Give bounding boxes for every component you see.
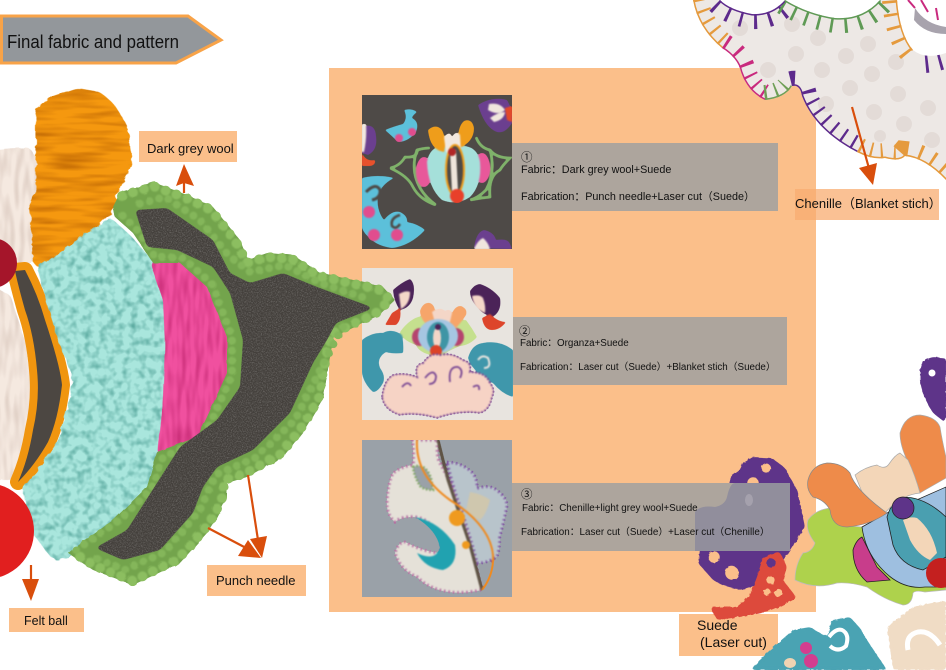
label: suede: Suede xyxy=(697,617,738,633)
felt ball: dark red xyxy=(0,238,17,288)
label: punch needle xyxy=(207,565,306,596)
text box 3: ③ xyxy=(521,488,533,501)
sample photo 2: organza with suede xyxy=(362,268,513,420)
arrow: felt ball xyxy=(22,565,39,601)
suede cloud: cream xyxy=(887,600,946,670)
dark grey wool section xyxy=(95,208,374,560)
text box 2: ② xyxy=(519,325,531,338)
label: suede: (Laser cut) xyxy=(700,634,767,650)
turquoise loop section xyxy=(22,217,172,560)
green knob border xyxy=(68,182,395,585)
text box 1: ① xyxy=(521,151,533,164)
label: felt ball: Felt ball xyxy=(24,614,68,628)
cream chenille section xyxy=(0,148,38,480)
arrow: chenille xyxy=(852,107,877,185)
orange and dark stripe xyxy=(15,270,62,482)
label: suede xyxy=(679,614,778,656)
text box 2: Fabrication：Laser cut（Suede）+Blanket stich（Suede） xyxy=(520,361,776,373)
text box 1 xyxy=(512,143,778,211)
text box 1: Fabric：Dark grey wool+Suede xyxy=(521,164,671,176)
text box 2 xyxy=(513,317,787,385)
title xyxy=(2,16,221,63)
text box 1: Fabrication：Punch needle+Laser cut（Suede） xyxy=(521,190,755,203)
text box 3 xyxy=(512,483,790,551)
suede piece: purple, left xyxy=(693,457,805,590)
arrow: dark grey wool xyxy=(176,164,194,193)
pink section xyxy=(150,258,232,455)
felt ball: bright red xyxy=(0,483,34,579)
label: chenille: Chenille（Blanket stich） xyxy=(795,196,942,211)
punch needle wool artwork xyxy=(0,88,395,585)
sample photo 1: dark grey wool with suede xyxy=(362,95,512,249)
text box 3: Fabric：Chenille+light grey wool+Suede xyxy=(522,503,698,514)
label: chenille xyxy=(795,189,942,220)
suede cloud: teal xyxy=(750,617,887,670)
sample photo 3: chenille, light grey wool and suede xyxy=(362,440,512,597)
arrows: punch needle xyxy=(208,475,267,558)
label: punch needle: Punch needle xyxy=(216,573,296,588)
text box 3: Fabrication：Laser cut（Suede）+Laser cut（Chenille） xyxy=(521,526,770,538)
orange wool section xyxy=(30,88,132,268)
suede flower, bottom right xyxy=(795,357,946,605)
label: felt ball xyxy=(9,608,84,632)
text box 2: Fabric：Organza+Suede xyxy=(520,338,629,349)
panel: fabric samples xyxy=(329,68,816,612)
label: dark grey wool xyxy=(139,131,237,162)
title: Final fabric and pattern xyxy=(7,31,179,52)
label: dark grey wool: Dark grey wool xyxy=(147,141,234,156)
suede piece: red xyxy=(710,552,797,620)
chenille piece with blanket stitch, top right xyxy=(680,0,946,190)
